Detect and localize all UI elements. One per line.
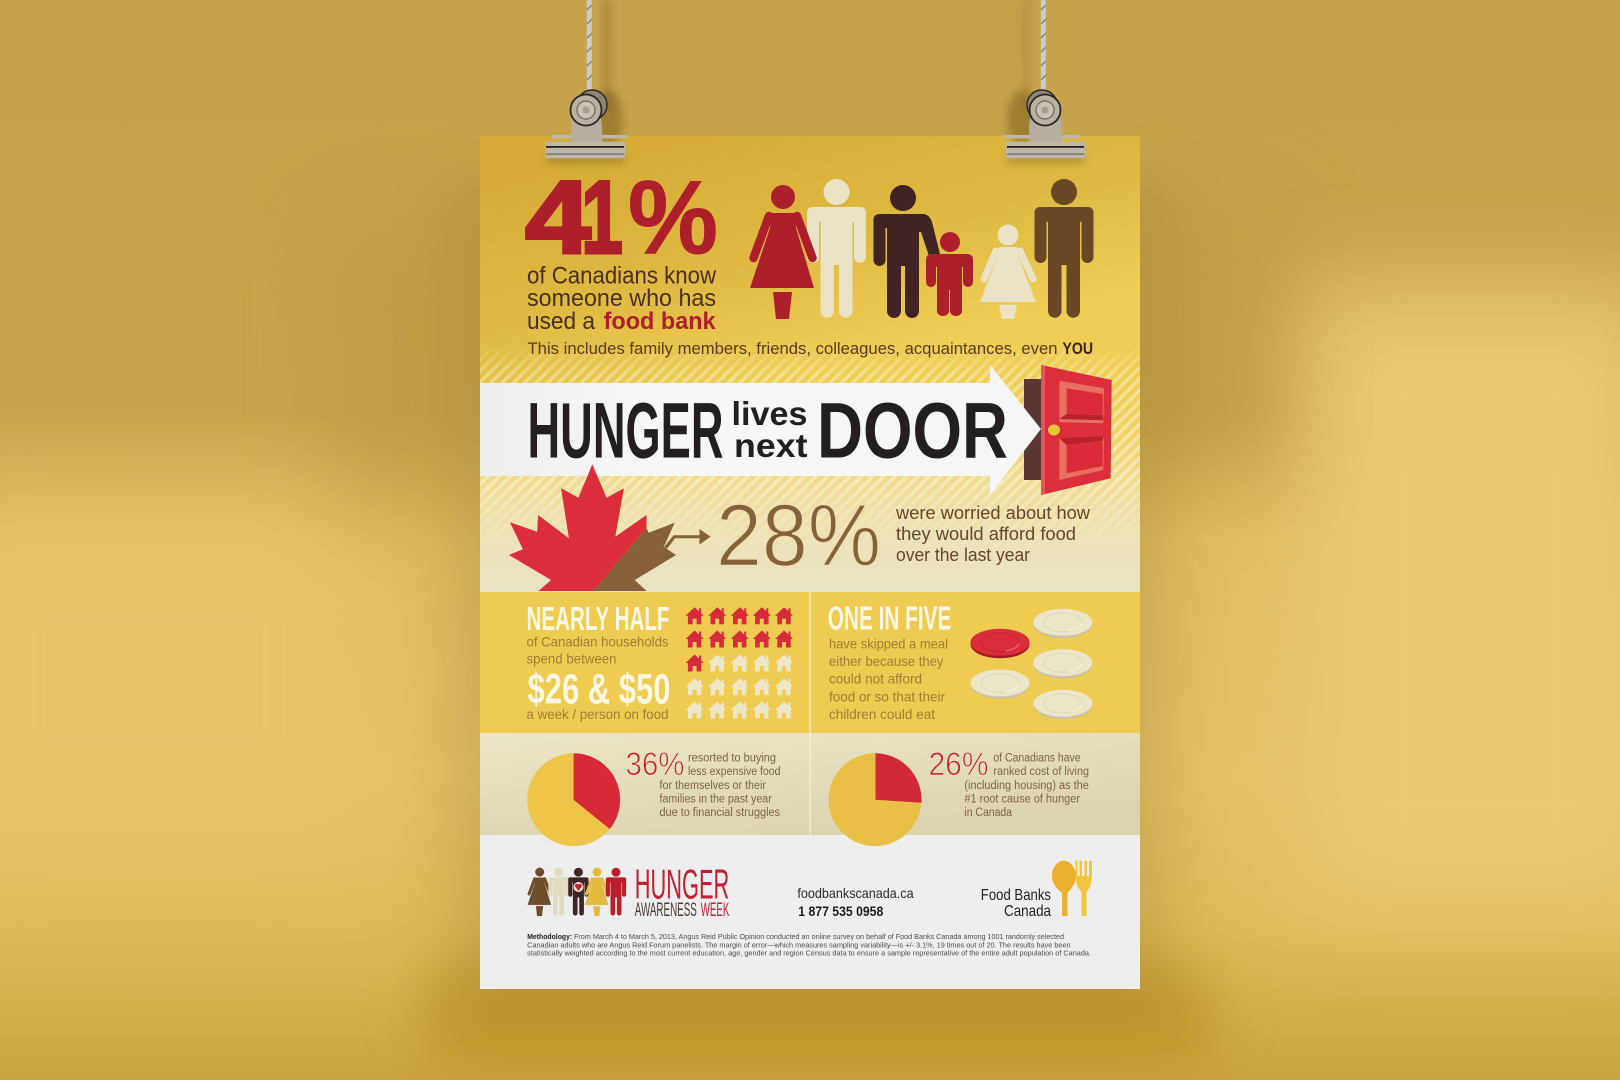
- title: hunger lives next door: HUNGER: [528, 385, 724, 474]
- icon: spoon: [1052, 861, 1076, 916]
- block: one in five text: food or so that their: [829, 688, 945, 704]
- text: of Canadians know: [527, 262, 717, 335]
- plate red: [970, 629, 1030, 658]
- text: cost of living: #1 root cause of hunger: [964, 794, 1080, 806]
- figure: man dark: [874, 185, 941, 318]
- block: one in five text: children could eat: [829, 706, 935, 722]
- block: one in five text: either because they: [829, 653, 944, 669]
- logo: hunger awareness week: WEEK: [701, 900, 729, 921]
- text: resorted: resorted to buying: [688, 753, 776, 765]
- text: resorted: families in the past year: [660, 794, 772, 806]
- figure: woman red: [750, 185, 814, 319]
- diagonal stripes: [480, 349, 1140, 536]
- poster: [480, 136, 1140, 989]
- text: includes family members: This includes family members, friends, colleagues, acquaintances, even: [528, 339, 1058, 358]
- text: cost of living: [964, 753, 1089, 819]
- figure: girl cream: [980, 224, 1036, 319]
- block: one in five text: [828, 599, 951, 722]
- text: methodology: Methodology:: [527, 932, 572, 941]
- arrow: [480, 365, 1041, 495]
- figure: man cream: [807, 179, 866, 318]
- logo figures: [528, 868, 626, 916]
- text: of Canadians know: of Canadians know: [527, 262, 717, 290]
- block: nearly half text: [526, 600, 670, 722]
- text: methodology: [527, 932, 1091, 958]
- door knob: [1048, 424, 1060, 436]
- title: hunger lives next door: next: [734, 427, 808, 464]
- divider: [810, 592, 811, 835]
- icon: maple leaf: [509, 464, 676, 591]
- panel: nearly half: [480, 592, 1140, 733]
- heading: 41 percent: [525, 160, 718, 276]
- heading: 41 percent: 4: [525, 160, 591, 276]
- logo: food banks canada: Food Banks: [981, 887, 1051, 904]
- panel: top statistic background: [480, 136, 1140, 476]
- logo: hunger awareness week: HUNGER: [635, 860, 729, 907]
- text: were worried: were worried about how: [895, 503, 1091, 523]
- text: methodology: Canadian adults who are Angus Reid Forum panelists. The margin of error—which measures sampling variability—is +/- 3.1%, 19 times out of 20. The results have been: [527, 940, 1071, 949]
- clip left: [545, 90, 628, 164]
- door panel bottom: [1059, 436, 1104, 480]
- contact details: 1 877 535 0958: [798, 903, 883, 919]
- heading: 41 percent: 1: [581, 160, 623, 276]
- hanging rope left: [587, 0, 611, 110]
- text: of Canadians know: someone who has: [527, 285, 716, 312]
- panel: 28 percent background: [480, 380, 1140, 592]
- icon: fork: [1076, 861, 1092, 916]
- block: nearly half text: NEARLY HALF: [526, 600, 670, 637]
- statistic: 26 percent: 26%: [928, 746, 988, 782]
- text: resorted: due to financial struggles: [660, 807, 780, 819]
- clip right: [1003, 90, 1085, 164]
- text: resorted: less expensive food: [688, 766, 780, 778]
- logo: hunger awareness week: AWARENESS: [635, 900, 697, 921]
- figure: man brown: [1034, 179, 1094, 318]
- pie chart 36 percent: [527, 753, 620, 846]
- logo: food banks canada: Canada: [1004, 903, 1051, 920]
- block: one in five text: ONE IN FIVE: [828, 599, 951, 636]
- contact details: [797, 885, 914, 919]
- text: cost of living: in Canada: [964, 807, 1013, 819]
- figure: boy red: [926, 232, 973, 316]
- text: resorted: for themselves or their: [660, 780, 766, 792]
- panel: footer: [480, 835, 1140, 989]
- logo: hunger awareness week: [528, 860, 729, 921]
- block: nearly half text: $26 & $50: [528, 666, 670, 714]
- panel: pies: [480, 733, 1140, 835]
- logo: food banks canada: [981, 861, 1092, 920]
- icons: plates: [970, 609, 1092, 719]
- door: [1041, 365, 1112, 495]
- title: hunger lives next door: lives: [732, 395, 808, 432]
- text: cost of living: (including housing) as the: [964, 780, 1089, 792]
- text: were worried: [895, 503, 1091, 565]
- text: methodology: statistically weighted according to the most current education, age, gender and region Census data to ensure a sample representative of the entire adult population of Canada.: [527, 949, 1091, 958]
- text: resorted: [660, 753, 780, 819]
- heading: 41 percent: %: [628, 160, 718, 276]
- statistic: 28 percent: 28%: [716, 486, 881, 584]
- family figures: [750, 179, 1094, 319]
- block: one in five text: could not afford: [829, 671, 922, 687]
- contact details: foodbankscanada.ca: [797, 885, 914, 901]
- title: hunger lives next door: DOOR: [817, 385, 1008, 474]
- door panel top: [1059, 381, 1104, 423]
- text: methodology: From March 4 to March 5, 2013, Angus Reid Public Opinion conducted an online survey on behalf of Food Banks Canada among 1001 randomly selected: [574, 932, 1064, 941]
- statistic: 36 percent: 36%: [626, 746, 684, 782]
- pie chart 26 percent: [829, 753, 922, 846]
- text: includes family members: YOU: [1062, 339, 1093, 358]
- door frame: [1024, 379, 1044, 480]
- text: of Canadians know: used a: [527, 308, 596, 335]
- text: cost of living: ranked cost of living: [993, 766, 1089, 778]
- text: were worried: they would afford food: [896, 524, 1076, 544]
- text: of Canadians know: food bank: [604, 308, 716, 335]
- text: were worried: over the last year: [896, 545, 1030, 565]
- hanging rope right: [1022, 0, 1046, 110]
- block: nearly half text: a week / person on food: [526, 706, 668, 722]
- arrow: leaf to percent: [665, 530, 710, 548]
- text: cost of living: of Canadians have: [993, 753, 1081, 765]
- icons: houses grid: [686, 607, 793, 718]
- block: nearly half text: spend between: [526, 650, 616, 666]
- block: nearly half text: of Canadian households: [526, 634, 668, 650]
- block: one in five text: have skipped a meal: [829, 635, 948, 651]
